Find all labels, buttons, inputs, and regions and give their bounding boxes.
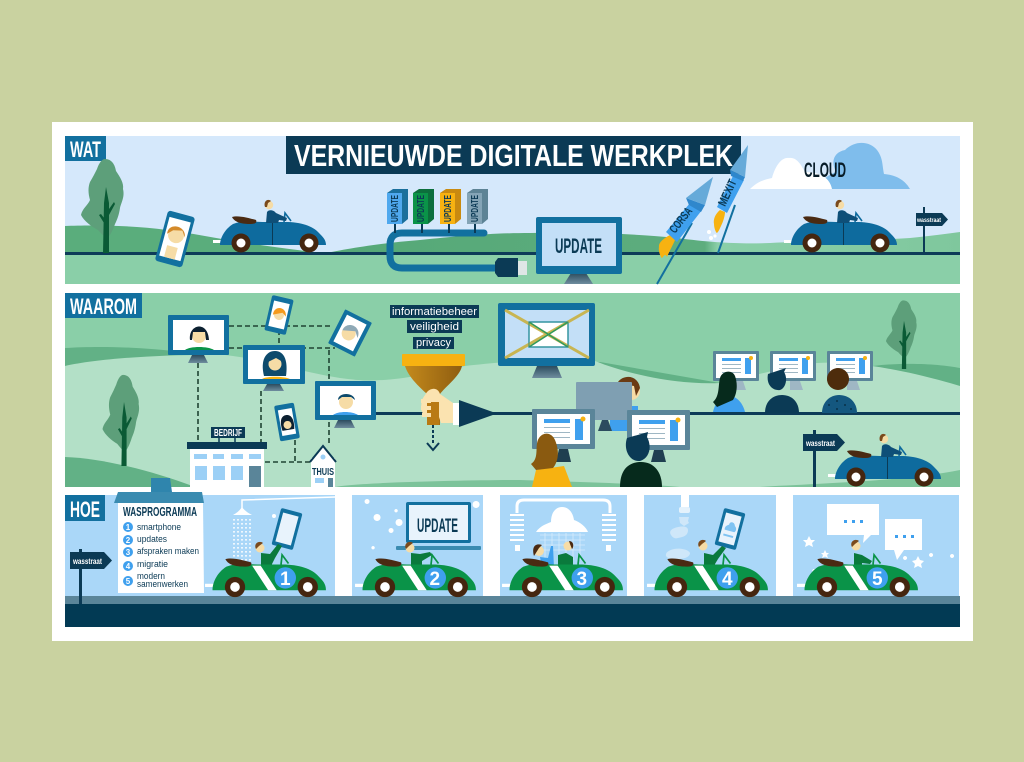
- road line: [65, 252, 960, 255]
- building: BEDRIJF: BEDRIJF: [214, 428, 242, 439]
- icon: smartphone: [155, 210, 195, 268]
- board: wasprogramma: [114, 478, 204, 593]
- cable: [390, 233, 497, 268]
- car: [828, 434, 941, 486]
- viewers row top: [713, 368, 857, 413]
- car: [784, 200, 897, 252]
- screen: [827, 351, 873, 381]
- white card: [52, 122, 973, 641]
- signpost: wasstraat: wasstraat: [916, 218, 941, 224]
- step 1: car: 1: [280, 569, 291, 590]
- phone: dark hair: [274, 403, 300, 441]
- list item 5: modern: [137, 571, 165, 581]
- viewer: woman in yellow: [531, 434, 572, 487]
- step 4: car: 4: [722, 569, 733, 590]
- step 4: car: [647, 540, 768, 597]
- rocket: CORSA: CORSA: [666, 204, 695, 236]
- signpost: wasstraat: wasstraat: [72, 557, 102, 566]
- step 4: phone with cloud: [714, 508, 746, 550]
- cable and update packages: [387, 189, 527, 277]
- package grey: UPDATE: [470, 195, 481, 222]
- update monitor: UPDATE: [555, 235, 602, 258]
- step 3: car wash: [510, 500, 616, 560]
- tag: HOE: HOE: [70, 497, 100, 522]
- bottom left hill: [65, 457, 195, 487]
- cloud: [750, 143, 910, 189]
- step 3: car with two people: [502, 541, 623, 597]
- house: THUIS: THUIS: [312, 467, 334, 478]
- list item 5: [123, 571, 188, 589]
- viewer: man dark: [620, 432, 662, 487]
- plug: [495, 258, 518, 277]
- labels: informatiebeheer, veiligheid, privacy: privacy: [416, 337, 452, 349]
- tree: [102, 375, 139, 466]
- rocket: MEXIT: [707, 145, 748, 253]
- dashed network lines: [198, 326, 335, 462]
- tag: WAAROM: WAAROM: [70, 294, 137, 319]
- package green: UPDATE: [416, 195, 427, 222]
- hill right: [322, 232, 960, 254]
- step 1: car: [205, 542, 326, 597]
- board: wasprogramma: WASPROGRAMMA: [123, 504, 197, 519]
- screen: [532, 409, 595, 449]
- car: [213, 200, 326, 252]
- signpost: wasstraat: [70, 549, 112, 604]
- cloud: CLOUD: [804, 159, 846, 182]
- step 2: car: [355, 542, 476, 597]
- list item 2: updates: [137, 534, 167, 544]
- list item 2: 2: [126, 536, 131, 545]
- panel: WAT: [65, 136, 960, 284]
- labels: informatiebeheer, veiligheid, privacy: veiligheid: [410, 321, 459, 333]
- bottom middle and right hills: [335, 470, 960, 487]
- signpost: wasstraat: wasstraat: [805, 439, 835, 448]
- tree: [81, 159, 124, 253]
- monitor: woman long hair: [243, 345, 305, 391]
- list item 5: samenwerken: [137, 579, 188, 589]
- scene backgrounds: [65, 495, 959, 597]
- list item 2: [123, 534, 167, 545]
- light hill: [65, 355, 960, 487]
- step 1: shower: [233, 497, 335, 562]
- dark hill: [65, 347, 960, 390]
- labels: informatiebeheer, veiligheid, privacy: [390, 305, 479, 349]
- tag: WAT: [65, 136, 106, 162]
- list item 3: 3: [126, 548, 131, 557]
- monitor: man short hair: [315, 381, 376, 428]
- step 1: phone: [271, 508, 303, 550]
- list item 3: [123, 546, 199, 557]
- tablet: grey hair: [328, 309, 372, 357]
- step 5: stars: [803, 536, 954, 573]
- building: BEDRIJF: [187, 427, 267, 487]
- list item 5: 5: [126, 577, 131, 586]
- road line: [376, 412, 960, 415]
- step 5: speech bubbles: [827, 504, 922, 560]
- tree: [886, 300, 917, 369]
- step 2: bubbles: [365, 499, 480, 549]
- tag: HOE: [65, 495, 105, 522]
- list item 4: migratie: [137, 559, 168, 569]
- step 2: laptop: UPDATE: [417, 516, 458, 537]
- rocket: CORSA: [657, 177, 713, 284]
- monitor row bottom: [532, 409, 690, 462]
- step 2: laptop: [396, 502, 481, 550]
- step 2: car: 2: [430, 569, 440, 590]
- step 4: hose and steam: [666, 495, 690, 559]
- step 5: car: 5: [872, 569, 883, 590]
- sky: [65, 136, 960, 284]
- hill left: [65, 225, 325, 254]
- rocket: MEXIT: MEXIT: [715, 177, 740, 208]
- package blue: UPDATE: [390, 195, 401, 222]
- panel: HOE: [65, 478, 960, 627]
- funnel with hand: [402, 354, 497, 427]
- screen: [770, 351, 816, 381]
- big monitor with crossed out window: [498, 303, 595, 378]
- screen: [713, 351, 759, 381]
- labels: informatiebeheer, veiligheid, privacy: informatiebeheer: [392, 306, 477, 318]
- update monitor: [536, 217, 622, 284]
- title: VERNIEUWDE DIGITALE WERKPLEK: [294, 138, 733, 173]
- list item 1: smartphone: [137, 522, 181, 532]
- step 3: car with two people: 3: [576, 569, 587, 590]
- step 5: car: [797, 540, 918, 597]
- monitor row top: [713, 351, 873, 390]
- list item 4: [123, 559, 168, 571]
- tag: WAAROM: [65, 293, 142, 319]
- list item 4: 4: [126, 562, 131, 571]
- panel: WAAROM: [65, 293, 960, 487]
- signpost: wasstraat: [916, 207, 948, 253]
- list item 1: 1: [126, 523, 131, 532]
- ground: [65, 254, 960, 284]
- road: [65, 596, 960, 605]
- package yellow: UPDATE: [443, 195, 454, 222]
- screen: [627, 410, 690, 450]
- monitor: woman black hair: [168, 315, 229, 363]
- tag: WAT: WAT: [70, 137, 101, 162]
- arrow: funnel output: [427, 425, 439, 450]
- background: [65, 293, 960, 487]
- signpost: wasstraat: [803, 430, 845, 487]
- phone: orange hair: [264, 295, 294, 335]
- house: THUIS: [310, 446, 336, 487]
- list item 3: afspraken maken: [137, 546, 199, 556]
- stems: [395, 224, 475, 233]
- person behind grey monitor: [576, 377, 640, 431]
